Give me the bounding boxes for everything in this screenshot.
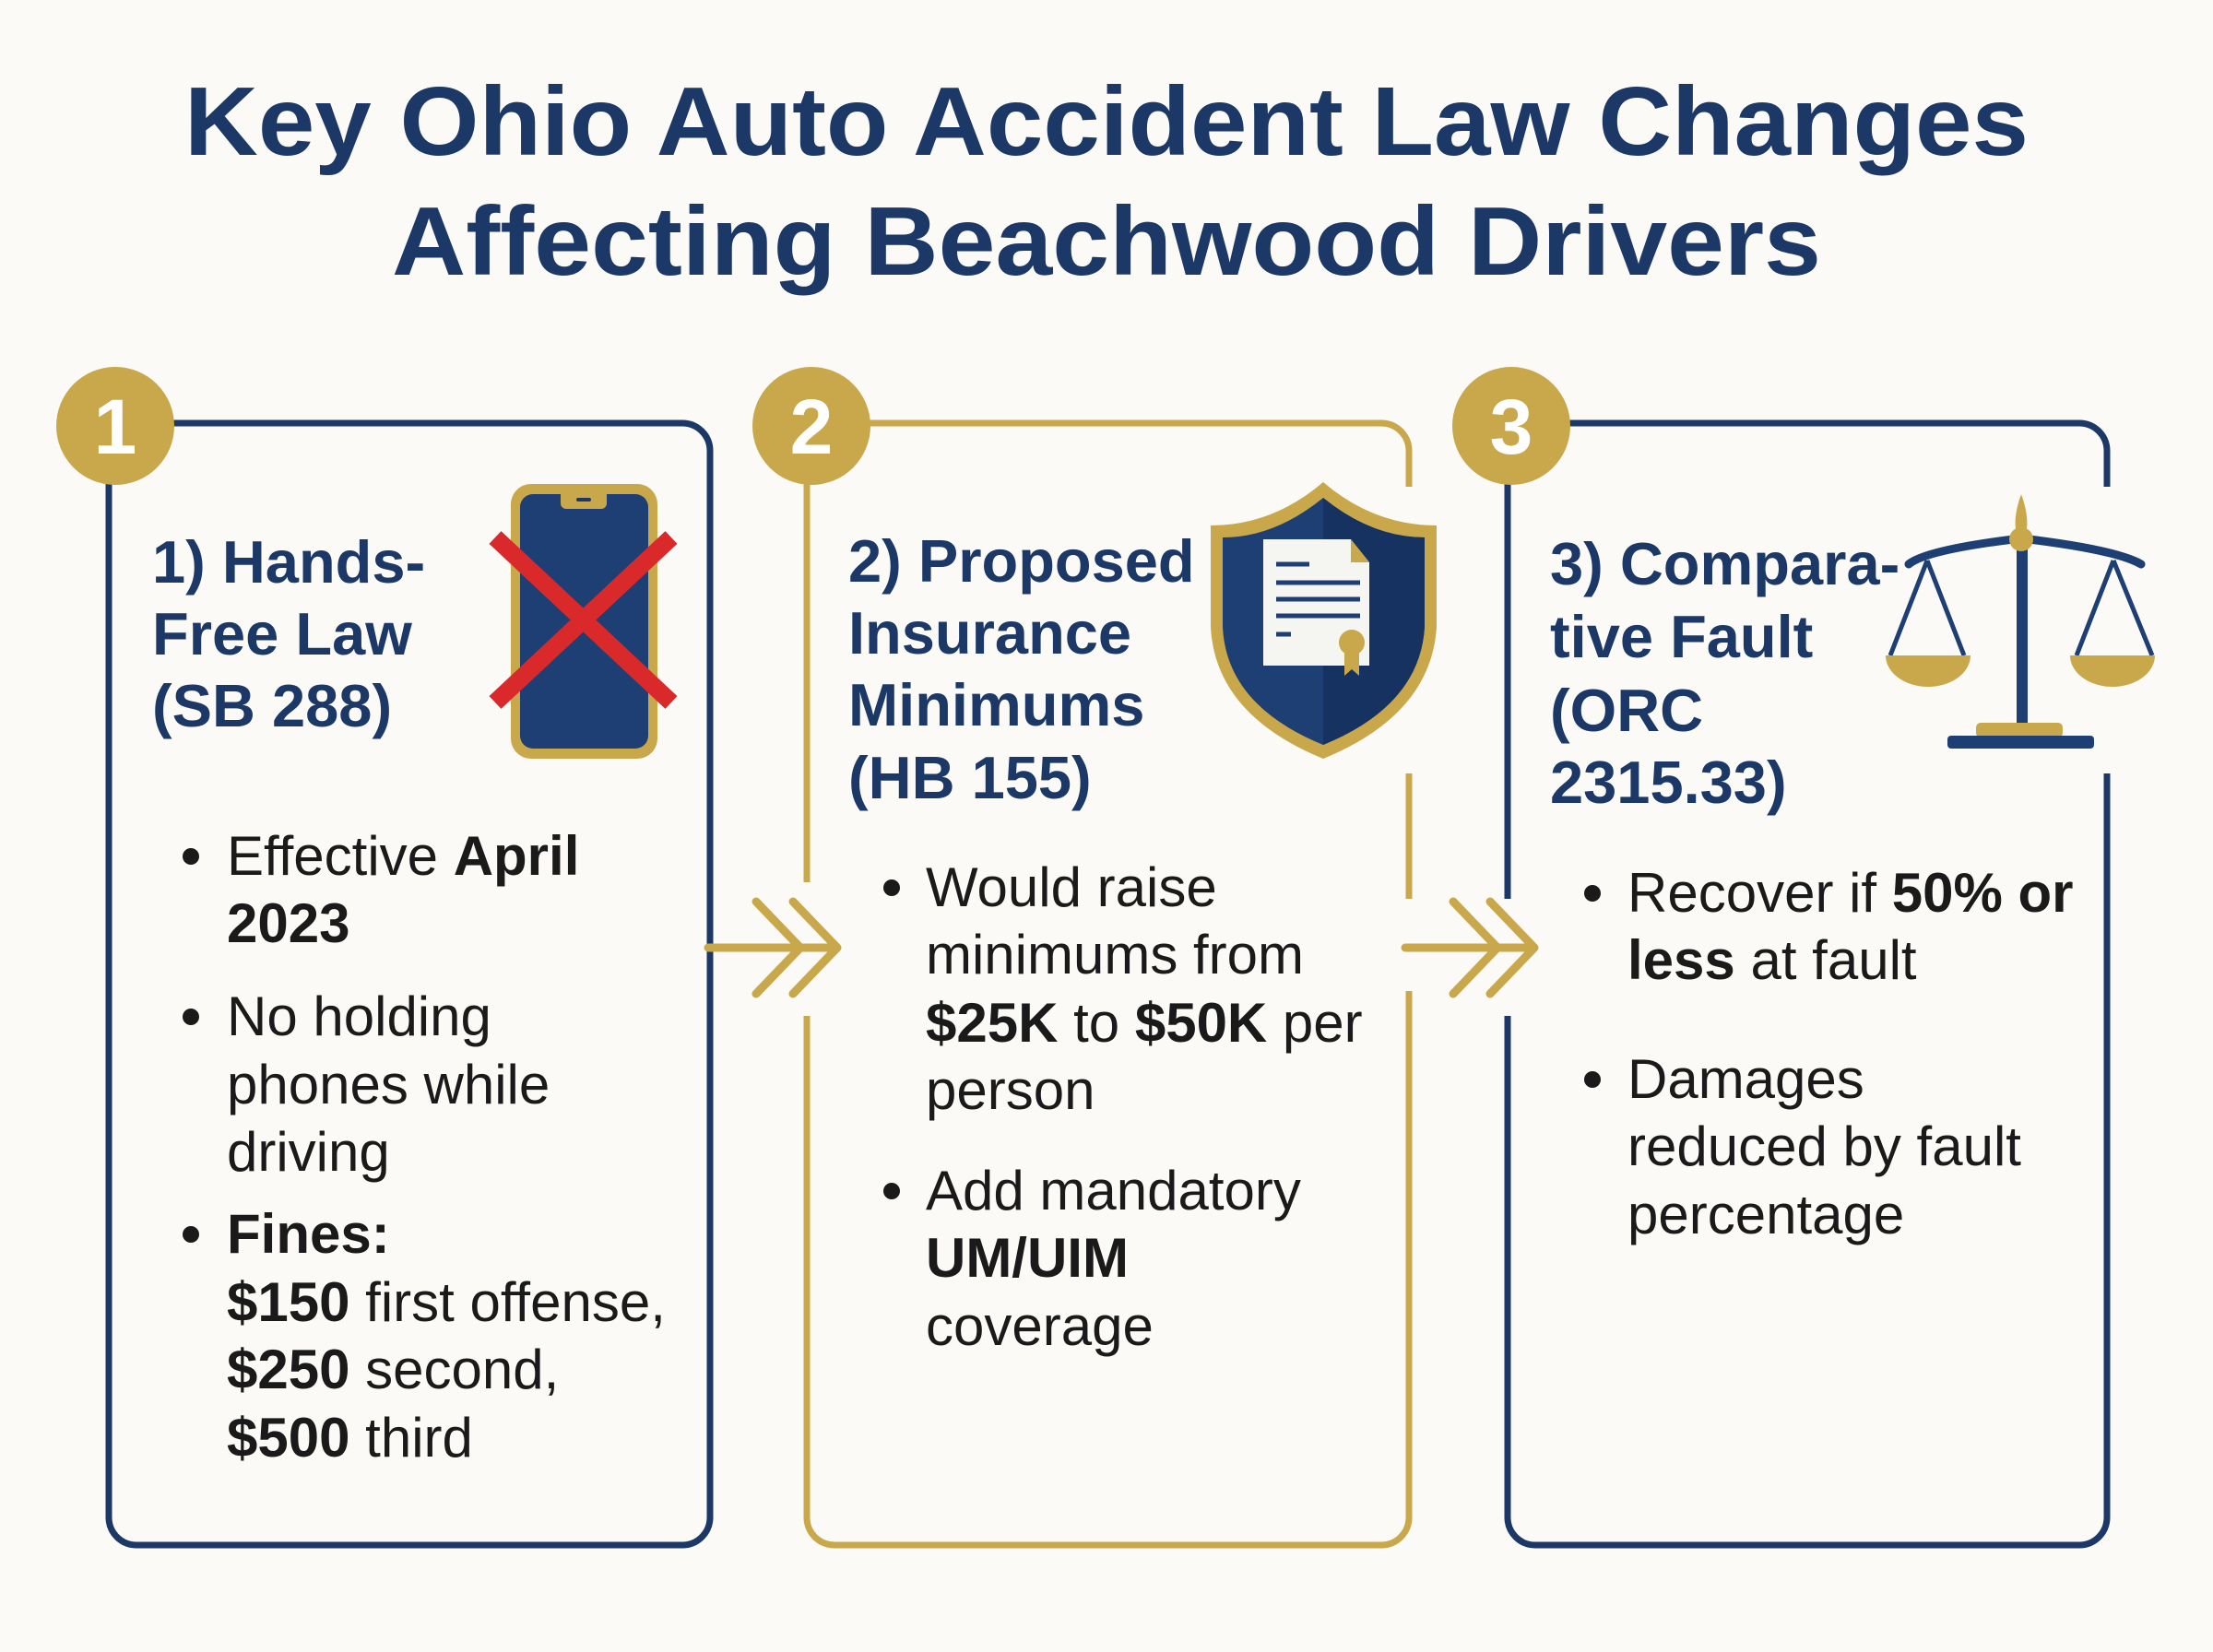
bullets 1: driving [227, 1121, 390, 1183]
arrow 1 to 2 [708, 902, 837, 994]
bullets 2: UM/UIM [926, 1227, 1129, 1289]
badge 1: 1 [94, 384, 136, 470]
bullets 3: Damages [1627, 1048, 1864, 1110]
bullets 2: person [926, 1059, 1095, 1121]
title [184, 67, 2029, 296]
icon: scales of justice [1886, 494, 2155, 749]
bullets 3: reduced by fault [1627, 1115, 2021, 1177]
heading 1: 1) Hands- [152, 528, 425, 596]
bullets 3: Recover if 50% or [1627, 862, 2074, 924]
title: Key Ohio Auto Accident Law Changes [184, 67, 2029, 176]
bullets 2: Add mandatory [926, 1160, 1301, 1221]
arrow 2 to 3 [1405, 902, 1534, 994]
bullets 1: 2023 [227, 892, 349, 954]
heading 3: tive Fault [1550, 603, 1813, 670]
bullets 1: Fines: [227, 1203, 390, 1265]
bullets 2: Would raise [926, 856, 1217, 918]
panel: hands-free law [56, 367, 710, 1545]
heading 2: 2) Proposed [848, 527, 1195, 595]
bullets 1: $500 third [227, 1407, 473, 1469]
heading 2: Minimums [848, 671, 1144, 738]
bullets 1: $250 second, [227, 1339, 559, 1400]
bullets 2: minimums from [926, 924, 1304, 985]
panel: insurance minimums [752, 367, 1437, 1545]
heading 2: Insurance [848, 599, 1131, 667]
heading 3: 2315.33) [1550, 749, 1787, 816]
heading 3 [1550, 530, 1899, 816]
bullets 3: less at fault [1627, 929, 1917, 991]
heading 3: 3) Compara- [1550, 530, 1899, 597]
bullets 2 [883, 856, 1363, 1357]
heading 3: (ORC [1550, 677, 1703, 744]
badge 2 [752, 367, 870, 485]
bullets 2: coverage [926, 1295, 1154, 1357]
badge 3: 3 [1490, 384, 1533, 470]
badge 3 [1452, 367, 1570, 485]
panel: comparative fault [1452, 367, 2155, 1545]
heading 2 [848, 527, 1195, 811]
badge 1 [56, 367, 174, 485]
icon: shield with document [1211, 482, 1437, 759]
bullets 1: Effective April [227, 825, 579, 887]
heading 1 [152, 528, 425, 739]
bullets 1: $150 first offense, [227, 1271, 666, 1333]
bullets 2: $25K to $50K per [926, 992, 1363, 1054]
heading 1: (SB 288) [152, 672, 392, 739]
heading 2: (HB 155) [848, 744, 1092, 811]
bullets 1: No holding [227, 985, 491, 1047]
bullets 1: phones while [227, 1054, 550, 1115]
title: Affecting Beachwood Drivers [392, 187, 1821, 296]
bullets 3 [1584, 862, 2074, 1245]
icon: phone crossed out [495, 484, 671, 759]
bullets 1 [183, 825, 666, 1469]
bullets 3: percentage [1627, 1184, 1904, 1245]
heading 1: Free Law [152, 600, 412, 667]
badge 2: 2 [790, 384, 833, 470]
